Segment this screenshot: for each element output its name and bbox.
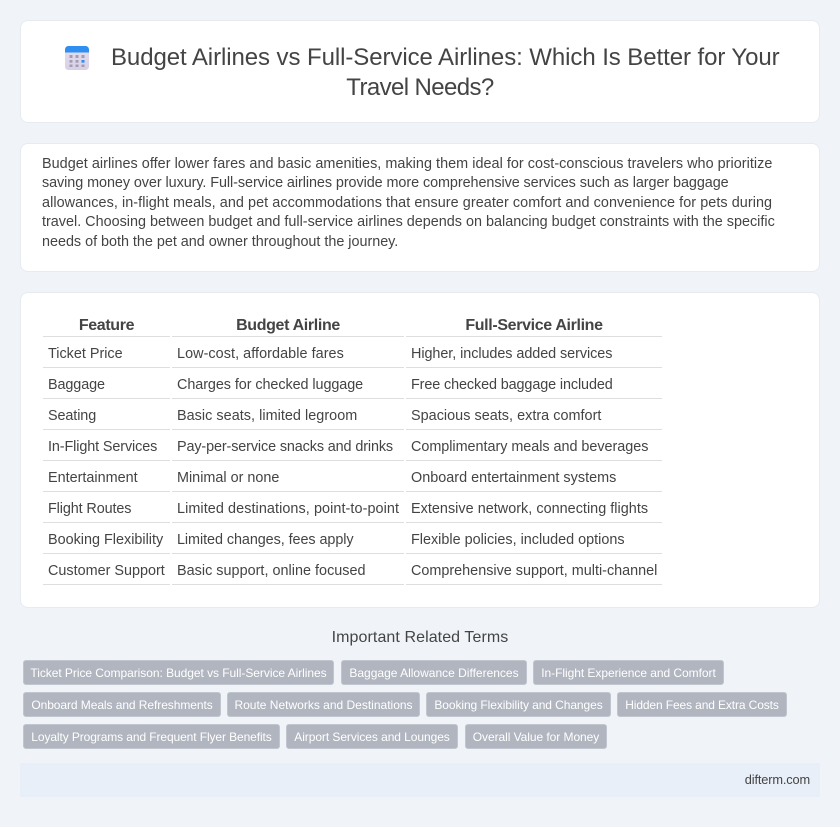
- table rows: Customer Support: [48, 563, 165, 579]
- table rows: Comprehensive support, multi-channel: [411, 563, 657, 579]
- table header: Full-Service Airline: [465, 317, 603, 334]
- related term tags: Route Networks and Destinations: [234, 698, 413, 712]
- panel: summary: [20, 143, 820, 272]
- table header: Feature: [79, 317, 134, 334]
- related term tags: Baggage Allowance Differences: [349, 666, 519, 680]
- table rows: Charges for checked luggage: [177, 377, 363, 393]
- related term tags: Overall Value for Money: [473, 730, 599, 744]
- table rows: Free checked baggage included: [411, 377, 613, 393]
- table rows: Baggage: [48, 377, 105, 393]
- table rows: Limited changes, fees apply: [177, 532, 354, 548]
- table rows: Flexible policies, included options: [411, 532, 625, 548]
- table header: Budget Airline: [236, 317, 340, 334]
- footer: [20, 763, 820, 797]
- table rows: In-Flight Services: [48, 439, 157, 455]
- table rows: Low-cost, affordable fares: [177, 346, 344, 362]
- table rows: Seating: [48, 408, 96, 424]
- table rows: Minimal or none: [177, 470, 279, 486]
- related term tags: In-Flight Experience and Comfort: [541, 666, 716, 680]
- text block: summary: allowances, in-flight meals, and pet accommodations that ensure greater comfort and convenience for pets during: [42, 195, 772, 211]
- table rows: Flight Routes: [48, 501, 131, 517]
- related term tags: Hidden Fees and Extra Costs: [625, 698, 779, 712]
- table rows: Complimentary meals and beverages: [411, 439, 648, 455]
- footer credit: difterm.com: [745, 772, 810, 787]
- table rows: Onboard entertainment systems: [411, 470, 616, 486]
- table rows: Pay-per-service snacks and drinks: [177, 439, 393, 455]
- title: [111, 44, 780, 101]
- table rows: Ticket Price: [48, 346, 123, 362]
- table header: [79, 317, 603, 334]
- heading: related terms: Important Related Terms: [332, 629, 508, 646]
- table rows: Entertainment: [48, 470, 138, 486]
- table rows: Basic support, online focused: [177, 563, 366, 579]
- related term tags: Onboard Meals and Refreshments: [31, 698, 213, 712]
- title: Travel Needs?: [346, 74, 494, 101]
- panel: header: [20, 20, 820, 123]
- table rows: Extensive network, connecting flights: [411, 501, 648, 517]
- related term tags: [23, 660, 787, 749]
- table rows: Spacious seats, extra comfort: [411, 408, 601, 424]
- text block: summary: travel. Choosing between budget and full-service airlines depends on balancing budget constraints with the specific: [42, 214, 775, 230]
- text block: summary: Budget airlines offer lower fares and basic amenities, making them ideal for cost-conscious travelers who prioritize: [42, 156, 772, 172]
- table rows: Limited destinations, point-to-point: [177, 501, 399, 517]
- related term tags: Loyalty Programs and Frequent Flyer Benefits: [31, 730, 272, 744]
- related term tags: Airport Services and Lounges: [294, 730, 450, 744]
- title: Budget Airlines vs Full-Service Airlines: Which Is Better for Your: [111, 44, 780, 71]
- table rows: Booking Flexibility: [48, 532, 163, 548]
- text block: summary: saving money over luxury. Full-service airlines provide more comprehensive services such as larger baggage: [42, 175, 729, 191]
- table rows: [48, 346, 657, 579]
- related term tags: Booking Flexibility and Changes: [434, 698, 603, 712]
- text block: summary: needs of both the pet and owner throughout the journey.: [42, 234, 398, 250]
- icon: calendar: [65, 46, 89, 70]
- related term tags: Ticket Price Comparison: Budget vs Full-Service Airlines: [30, 666, 327, 680]
- panel: comparison table: [20, 292, 820, 608]
- table rows: Basic seats, limited legroom: [177, 408, 357, 424]
- table rows: Higher, includes added services: [411, 346, 612, 362]
- text block: summary: [42, 156, 775, 250]
